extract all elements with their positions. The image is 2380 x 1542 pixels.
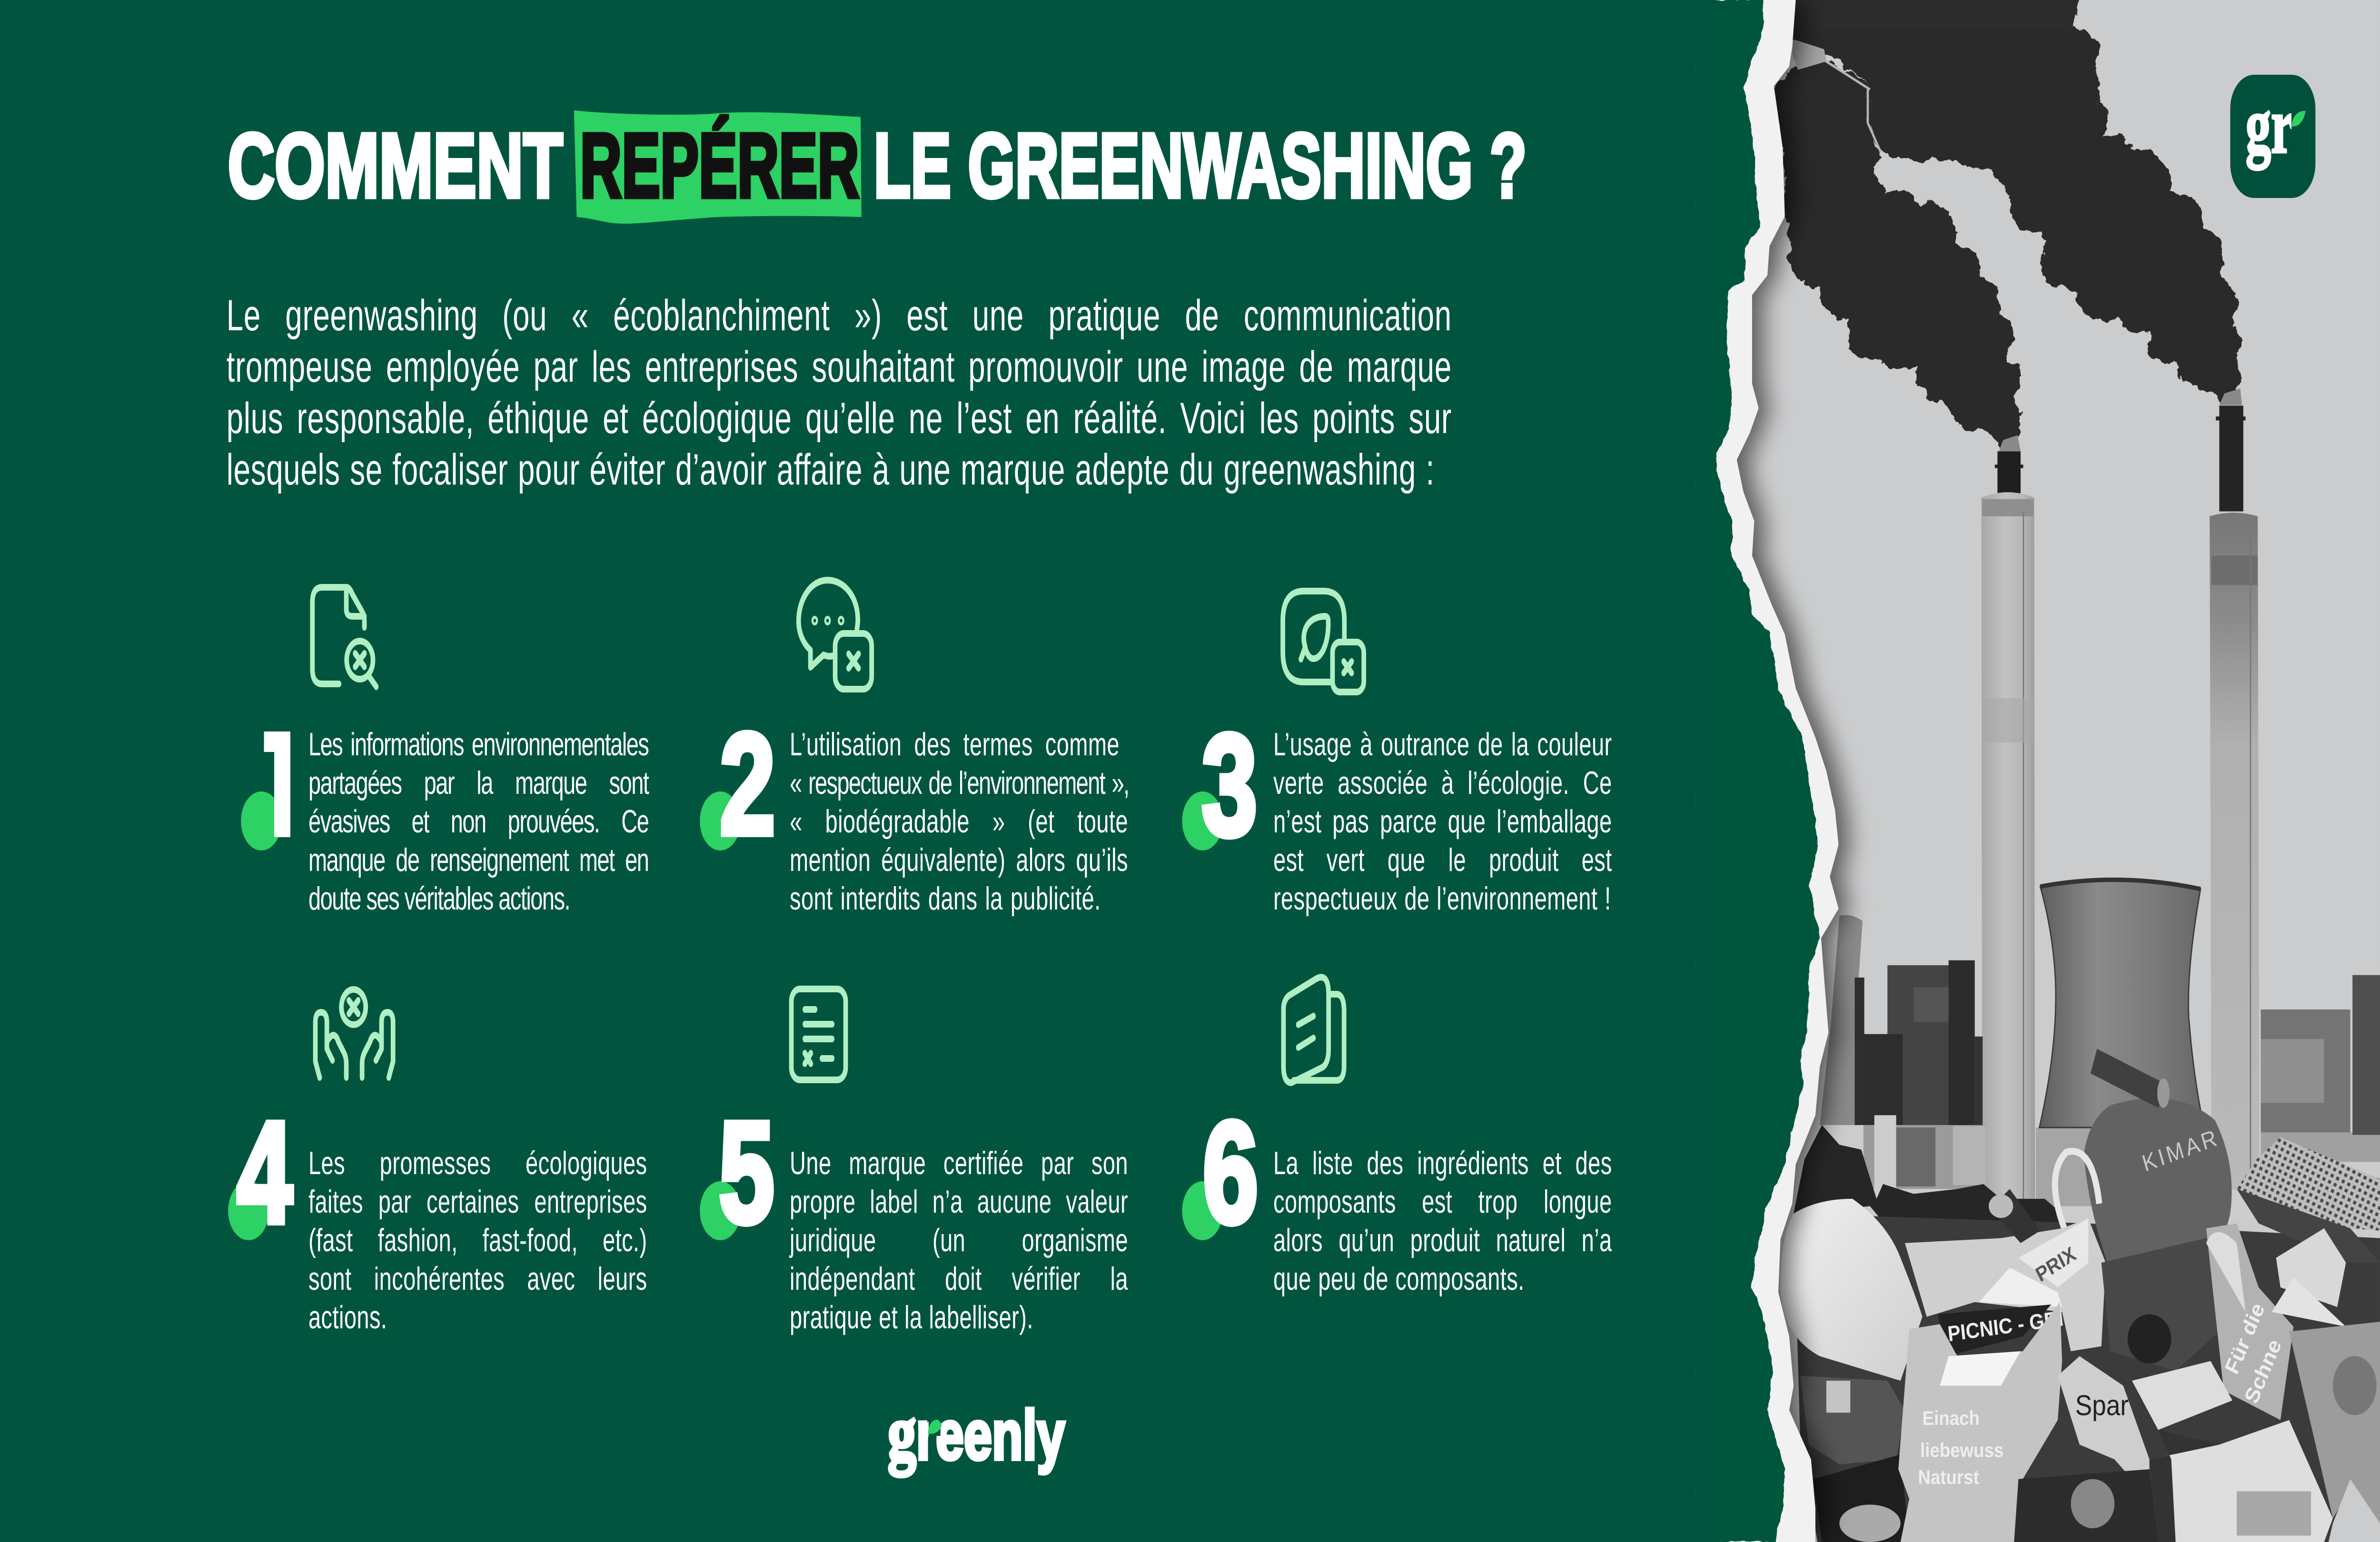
text 2: « biodégradable » (et toute [790, 803, 1128, 840]
handle bag [2206, 1224, 2293, 1420]
left chimney [1981, 451, 2035, 1205]
power plant and waste pile: liebewuss [1920, 1440, 2003, 1462]
highlight brush behind repérer [574, 110, 862, 224]
text 4: faites par certaines entreprises [308, 1184, 647, 1220]
number 1: 1 [252, 704, 307, 865]
intro paragraph [227, 290, 1478, 495]
power plant and waste pile: Spar [2075, 1390, 2129, 1422]
text 2: « respectueux de l’environnement », [790, 765, 1129, 801]
text 5 [790, 1144, 1129, 1337]
text 3: respectueux de l’environnement ! [1273, 880, 1611, 917]
text 6: La liste des ingrédients et des [1273, 1145, 1612, 1181]
trees [1794, 1125, 2062, 1243]
number 6: 6 [1203, 1092, 1258, 1253]
right chimney [2210, 405, 2260, 1190]
logo badge: gr: gr [2246, 81, 2293, 170]
text 1: évasives et non prouvées. Ce [308, 803, 648, 840]
small cooling tower [1820, 915, 1863, 1125]
item 4 [224, 980, 652, 1314]
text 4: sont incohérentes avec leurs [308, 1261, 647, 1297]
panel: photo collage with torn paper edge [1696, 0, 2380, 1542]
icon: leaf [928, 1420, 942, 1434]
large cooling tower [2039, 880, 2204, 1127]
icon: hands with cross [316, 989, 393, 1077]
green dot 1 [241, 791, 282, 850]
text 1: partagées par la marque sont [308, 765, 648, 801]
white bag [1780, 1199, 1923, 1381]
icon: speech bubble with cross [799, 580, 872, 689]
sign [1938, 1305, 2051, 1356]
number 5: 5 [719, 1092, 774, 1253]
text 2: sont interdits dans la publicité. [790, 880, 1101, 917]
text 3: verte associée à l’écologie. Ce [1273, 765, 1612, 801]
bottom white bag [2150, 1420, 2333, 1542]
green dot 6 [1182, 1181, 1223, 1240]
logo badge: gr [2230, 75, 2315, 198]
text 5: indépendant doit vérifier la [790, 1261, 1128, 1297]
power plant and waste pile: Naturst [1918, 1467, 1979, 1489]
icon: leaf in frame with cross [1283, 591, 1364, 692]
intro paragraph: trompeuse employée par les entreprises souhaitant promouvoir une image de marque [227, 343, 1452, 391]
paper bag [1898, 1302, 2062, 1542]
text 3: n’est pas parce que l’emballage [1273, 803, 1612, 840]
power plant and waste pile: PICNIC - GRI [1946, 1306, 2064, 1346]
power plant and waste pile: PRIX [2032, 1242, 2079, 1286]
torn white paper strip [1696, 0, 1838, 1542]
centre clutter [2102, 1238, 2241, 1371]
bottom dark area [2014, 1469, 2158, 1542]
power plant and waste pile: Einach [1923, 1408, 1980, 1430]
text 1: Les informations environnementales [308, 726, 648, 762]
icon: document search cross [312, 587, 376, 687]
title [198, 71, 1580, 238]
text 2: L’utilisation des termes comme [790, 726, 1120, 762]
text 6 [1273, 1144, 1612, 1298]
item 3 [1175, 581, 1616, 923]
text 4: (fast fashion, fast-food, etc.) [308, 1222, 647, 1258]
text 1: manque de renseignement met en [308, 842, 648, 878]
text 1: doute ses véritables actions. [308, 880, 570, 917]
text 1 [308, 725, 648, 918]
Spar bag [2058, 1356, 2150, 1499]
number 3: 3 [1202, 705, 1257, 866]
waste base [1794, 1214, 2380, 1542]
title: COMMENT [228, 115, 563, 217]
middle papers [1905, 1218, 2106, 1351]
title: REPÉRER [580, 115, 859, 217]
KIMAR bag [2084, 1098, 2231, 1287]
item 1 [227, 581, 655, 923]
factory buildings [1854, 978, 1864, 1125]
green dot 5 [700, 1181, 741, 1240]
text 2 [790, 725, 1129, 918]
power plant and waste pile: Schne [2240, 1335, 2286, 1407]
text 6: composants est trop longue [1273, 1184, 1612, 1220]
number 4: 4 [237, 1092, 293, 1253]
icon: checklist with cross [792, 989, 846, 1080]
light wisps in the smoke [1792, 40, 1826, 70]
intro paragraph: plus responsable, éthique et écologique qu’elle ne l’est en réalité. Voici les points sur [227, 394, 1452, 443]
text 5: juridique (un organisme [790, 1222, 1128, 1258]
title: LE GREENWASHING ? [873, 115, 1527, 217]
sky background [1696, 0, 2380, 1542]
smoke plumes [1774, 0, 2243, 450]
number 2: 2 [720, 704, 775, 865]
text 5: Une marque certifiée par son [790, 1145, 1128, 1181]
text 6: alors qu’un produit naturel n’a [1273, 1222, 1612, 1258]
intro paragraph: Le greenwashing (ou « écoblanchiment ») est une pratique de communication [227, 291, 1452, 340]
number 1 [264, 731, 290, 837]
intro paragraph: lesquels se focaliser pour éviter d’avoir affaire à une marque adepte du greenwashing : [227, 445, 1435, 494]
can on top [2091, 1049, 2169, 1108]
item 6 [1175, 971, 1616, 1314]
icon: folded leaflet [1283, 977, 1344, 1083]
text 5: pratique et la labelliser). [790, 1299, 1033, 1335]
text 3: est vert que le produit est [1273, 842, 1612, 878]
power plant and waste pile: KIMAR [2139, 1124, 2222, 1176]
power plant and waste pile [1780, 880, 2380, 1542]
text 4: actions. [308, 1299, 387, 1335]
text 6: que peu de composants. [1273, 1261, 1525, 1297]
green torn edge [1696, 0, 1820, 1542]
power plant and waste pile: Für die [2220, 1299, 2269, 1378]
item 2 [698, 571, 1132, 923]
text 3: L’usage à outrance de la couleur [1273, 726, 1612, 762]
right cooling towers [2261, 1009, 2350, 1132]
green dot 3 [1182, 791, 1223, 850]
text 4 [308, 1144, 647, 1337]
text 2: mention équivalente) alors qu’ils [790, 842, 1128, 878]
right bag [2289, 1322, 2380, 1542]
text 4: Les promesses écologiques [308, 1145, 647, 1181]
silver packaging [2237, 1137, 2380, 1231]
green dot 4 [228, 1181, 269, 1240]
text 3 [1273, 725, 1612, 918]
green dot 2 [700, 791, 741, 850]
item 5 [698, 980, 1132, 1314]
text 5: propre label n’a aucune valeur [790, 1184, 1128, 1220]
